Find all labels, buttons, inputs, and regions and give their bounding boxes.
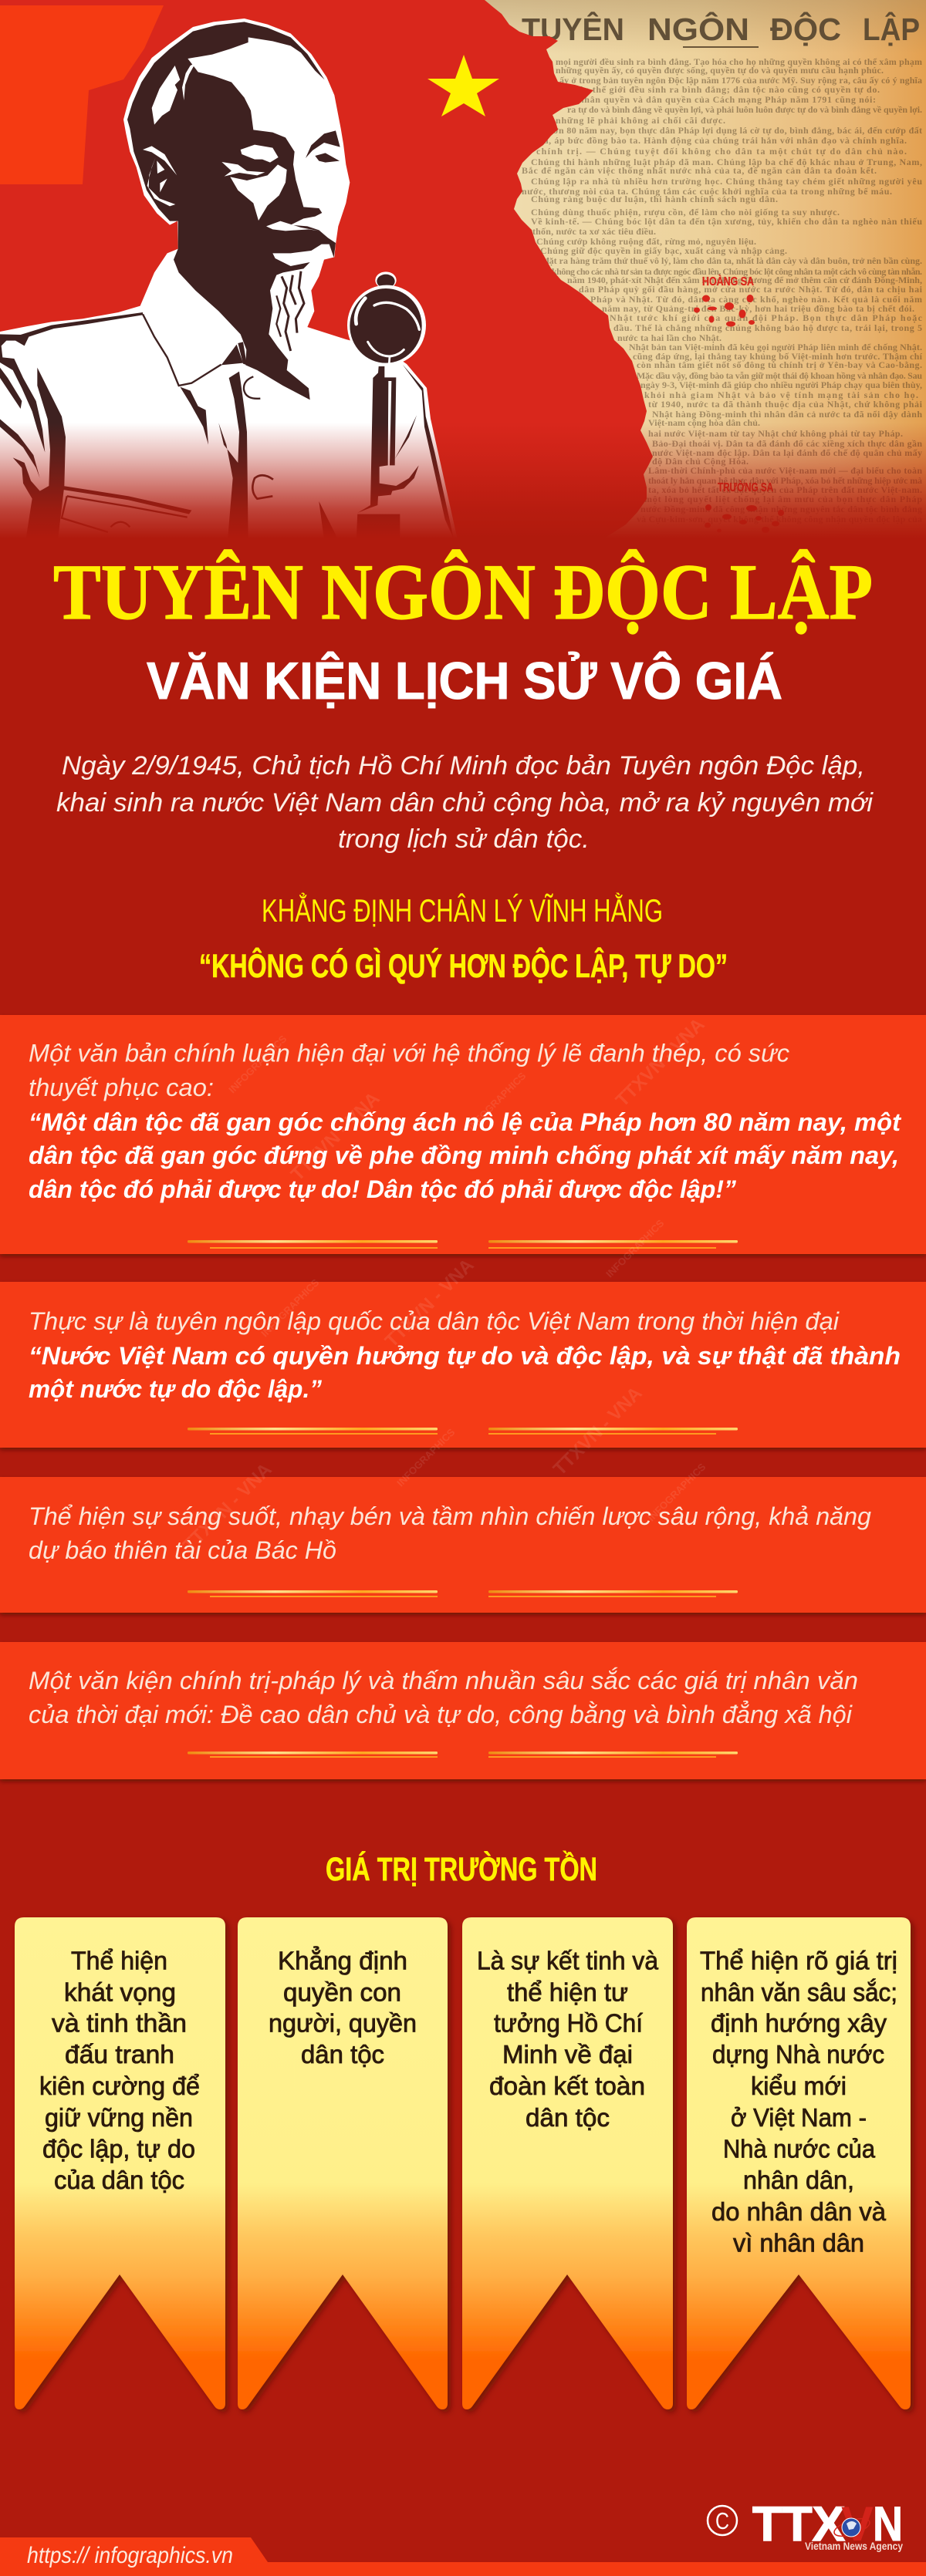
card: fourth value: kiểu mới <box>751 2072 847 2100</box>
bold quotation: “Một dân tộc đã gan góc chống ách nô lệ của Pháp hơn 80 năm nay, một <box>29 1108 901 1136</box>
card: second value: Khẳng định <box>278 1946 407 1974</box>
newspaper body text: ấy ở trong bản tuyên ngôn Độc lập năm 1776 của nước Mỹ. Suy rộng ra, câu ấy có ý nghĩa <box>559 75 922 86</box>
newspaper body text: Mặc dầu vậy, đồng bào ta vẫn giữ một thái độ khoan hồng và nhân đạo. Sau <box>637 370 922 381</box>
panel: fourth statement <box>0 1642 926 1779</box>
card: third value: Là sự kết tinh và <box>477 1946 659 1974</box>
logo: copyright and TTXVN: Vietnam News Agency <box>805 2541 903 2552</box>
card: first value: của dân tộc <box>54 2166 184 2194</box>
newspaper body text: thoát ly hẳn quan hệ thực dân với Pháp, xóa bỏ hết những hiệp ước mà <box>648 475 922 486</box>
newspaper body text: ta, xóa bỏ hết tất cả đặc quyền của Pháp trên đất nước Việt-nam. <box>648 484 922 495</box>
intro paragraph: trong lịch sử dân tộc. <box>338 824 590 854</box>
text: INFOGRAPHICS <box>259 1276 322 1339</box>
panel: third statement: Thể hiện sự sáng suốt, nhạy bén và tầm nhìn chiến lược sâu rộng, khả năng <box>29 1502 871 1530</box>
icon: copyright <box>708 2506 737 2535</box>
newspaper body text: đầu. Thế là chẳng những chúng không bảo hộ được ta, trái lại, trong 5 <box>613 322 922 333</box>
card: first value <box>15 1917 225 2409</box>
newspaper body text: Chúng dùng thuốc phiện, rượu cồn, để làm cho nòi giống ta suy nhược. <box>531 207 840 217</box>
newspaper body text: Bắc để ngăn cản việc thống nhất nước nhà của ta, để ngăn cản dân ta đoàn kết. <box>522 165 877 176</box>
card: second value: dân tộc <box>301 2040 384 2069</box>
panel: first statement: Một văn bản chính luận hiện đại với hệ thống lý lẽ đanh thép, có sức <box>29 1040 789 1067</box>
icon: yellow star <box>428 55 499 116</box>
panel: fourth statement: của thời đại mới: Đề cao dân chủ và tự do, công bằng và bình đẳng xã hội <box>29 1701 853 1728</box>
card: third value: đoàn kết toàn <box>489 2072 645 2100</box>
newspaper body text: Chúng thi hành những luật pháp dã man. Chúng lập ba chế độ khác nhau ở Trung, Nam, <box>531 157 922 167</box>
newspaper body text: khỏi nhà giam Nhật và bảo vệ tính mạng tài sản cho họ. <box>644 389 918 400</box>
card: first value: và tinh thần <box>52 2009 187 2038</box>
portrait hair, shadow and beard <box>127 22 336 400</box>
intro paragraph: khai sinh ra nước Việt Nam dân chủ cộng hòa, mở ra kỷ nguyên mới <box>56 788 874 818</box>
card: second value: người, quyền <box>269 2009 417 2038</box>
card: fourth value: Nhà nước của <box>723 2135 876 2163</box>
islands: Trường Sa <box>705 504 784 533</box>
newspaper body text: không cho các nhà tư sản ta được ngóc đầu lên. Chúng bóc lột công nhân ta một cách vô cùng tàn nhẫn. <box>552 266 922 277</box>
newspaper headline: LẬP <box>863 12 920 47</box>
panel: third statement: dự báo thiên tài của Bác Hồ <box>29 1536 336 1564</box>
panel: red flag map shape <box>0 0 653 540</box>
card: first value: khát vọng <box>64 1978 176 2006</box>
footer band with website: https:// infographics.vn <box>27 2543 233 2568</box>
newspaper body text: Lâm-thời Chính-phủ của nước Việt-nam mới — đại biểu cho toàn <box>648 465 922 476</box>
panel: first statement <box>0 1015 926 1254</box>
newspaper body text: Chúng giữ độc quyền in giấy bạc, xuất cảng và nhập cảng. <box>540 245 787 256</box>
logo: copyright and TTXVN: TTX <box>752 2497 845 2551</box>
text: INFOGRAPHICS <box>465 1070 529 1132</box>
newspaper headline: TUYÊN <box>522 12 624 47</box>
subtitle: VĂN KIỆN LỊCH SỬ VÔ GIÁ <box>147 651 782 710</box>
bold quotation: “Nước Việt Nam có quyền hưởng tự do và độc lập, và sự thật đã thành <box>29 1342 901 1370</box>
card: third value: Minh về đại <box>502 2040 633 2069</box>
card: first value: Thể hiện <box>71 1946 167 1974</box>
newspaper body text: ta, áp bức đồng bào ta. Hành động của chúng trái hẳn với nhân đạo và chính nghĩa. <box>540 135 907 146</box>
newspaper body text: những quyền ấy, có quyền được sống, quyền tự do và quyền mưu cầu hạnh phúc. <box>556 65 884 76</box>
portrait white highlights: hair, ear, eye, cheek, moustache <box>143 63 319 231</box>
bold quotation <box>29 1342 901 1403</box>
card: fourth value: vì nhân dân <box>733 2228 864 2257</box>
newspaper body text: ngày 9-3, Việt-minh đã giúp cho nhiều người Pháp chạy qua biên thùy, <box>640 379 922 390</box>
card: third value: dân tộc <box>526 2103 610 2132</box>
card: first value: giữ vững nền <box>45 2103 193 2132</box>
panel: second statement <box>0 1282 926 1448</box>
panel: fourth statement: Một văn kiện chính trị-pháp lý và thấm nhuần sâu sắc các giá trị nhân văn <box>29 1667 858 1694</box>
islands: Hoàng Sa <box>694 295 755 327</box>
card: fourth value: định hướng xây <box>711 2009 887 2038</box>
intro paragraph <box>56 751 874 854</box>
newspaper body text: dân Pháp quỳ gối đầu hàng, mở cửa nước ta rước Nhật. Từ đó, dân ta chịu hai <box>579 284 923 295</box>
newspaper body text: nhân quyền và dân quyền của Cách mạng Pháp năm 1791 cũng nói: <box>579 94 876 105</box>
newspaper headline: ĐỘC <box>770 12 841 47</box>
text: TTXVN - VNA <box>287 1088 384 1185</box>
card: fourth value: nhân văn sâu sắc; <box>701 1978 897 2006</box>
newspaper body text: nước Đồng-minh đã công nhận những nguyên tắc dân tộc bình đẳng <box>640 504 922 514</box>
bold quotation: dân tộc đã gan góc đứng về phe đồng minh chống phát xít mấy năm nay, <box>29 1141 899 1169</box>
newspaper body text: độ Dân chủ Cộng Hòa. <box>652 456 749 467</box>
newspaper body text: đặt ra hàng trăm thứ thuế vô lý, làm cho dân ta, nhất là dân cày và dân buôn, trở nên bần cùng. <box>544 255 922 266</box>
bold quotation <box>29 1108 901 1203</box>
portrait white silhouette <box>0 19 458 540</box>
newspaper body text: Nhật hàng Đồng-minh thì nhân dân cả nước ta đã nổi dậy dành <box>652 409 922 420</box>
newspaper headline: NGÔN <box>647 12 749 47</box>
newspaper body text: Nhật bản tan Việt-minh đã kêu gọi người Pháp liên minh để chống Nhật. <box>629 342 922 352</box>
card: second value: quyền con <box>283 1978 401 2006</box>
logo: copyright and TTXVN: N <box>873 2497 903 2551</box>
newspaper body text: Chúng ràng buộc dư luận, thi hành chính sách ngu dân. <box>531 194 778 204</box>
text: INFOGRAPHICS <box>645 1461 708 1523</box>
panel: orange corner block <box>0 5 164 184</box>
bold quotation: dân tộc đó phải được tự do! Dân tộc đó phải được độc lập!” <box>29 1175 736 1203</box>
text: INFOGRAPHICS <box>603 1217 667 1280</box>
label: Hoàng Sa: HOÀNG SA <box>702 274 754 288</box>
logo: copyright and TTXVN: V <box>841 2497 874 2551</box>
newspaper body text: từ 1940, nước ta đã thành thuộc địa của Nhật, chứ không phải <box>648 399 923 410</box>
newspaper body text: Chúng cướp không ruộng đất, rừng mỏ, nguyên liệu. <box>536 236 756 247</box>
newspaper body text: Về kinh-tế. — Chúng bóc lột dân ta đến tận xương, tủy, khiến cho dân ta nghèo nàn thiếu <box>531 216 922 227</box>
newspaper body text: mọi người đều sinh ra bình đẳng. Tạo hóa cho họ những quyền không ai có thể xâm phạm <box>556 56 922 67</box>
card: fourth value: do nhân dân và <box>711 2197 887 2226</box>
intro paragraph: Ngày 2/9/1945, Chủ tịch Hồ Chí Minh đọc bản Tuyên ngôn Độc lập, <box>62 751 865 781</box>
card: fourth value <box>687 1917 911 2409</box>
microphone <box>347 271 454 540</box>
newspaper body text: cũng đáp ứng, lại thẳng tay khủng bố Việt-minh hơn trước. Thậm chí <box>633 351 923 362</box>
newspaper body text: một lòng quyết liệt chống lại âm mưu của bọn thực dân Pháp <box>644 494 922 504</box>
card: first value: kiên cường để <box>39 2072 200 2100</box>
newspaper body text: trên thế giới đều sinh ra bình đẳng; dân tộc nào cũng có quyền tự do. <box>571 84 880 95</box>
coat folds, collar, pocket and buttons <box>0 312 338 540</box>
newspaper body text: nước ta hai lần cho Nhật. <box>617 332 722 343</box>
newspaper headline <box>522 12 920 47</box>
text: TTXVN - VNA <box>612 1014 709 1111</box>
header bottom fade <box>0 423 926 540</box>
card: fourth value: Thể hiện rõ giá trị <box>700 1946 897 1974</box>
newspaper body text: Pháp và Nhật. Từ đó, dân ta càng cực khổ, nghèo nàn. Kết quả là cuối năm <box>590 294 922 305</box>
panel: newspaper background <box>478 0 926 540</box>
newspaper body text: ra tự do và bình đẳng về quyền lợi, và phải luôn luôn được tự do và bình đẳng về quyền lợi. <box>567 104 922 115</box>
newspaper body text: Bảo-Đại thoái vị. Dân ta đã đánh đổ các xiềng xích thực dân gần <box>652 438 922 449</box>
newspaper body text: chính trị. — Chúng tuyệt đối không cho dân ta một chút tự do dân chủ nào. <box>536 146 907 157</box>
card: first value: đấu tranh <box>65 2040 174 2069</box>
portrait beard strands <box>276 271 304 351</box>
card: fourth value: dựng Nhà nước <box>712 2040 884 2069</box>
newspaper body text <box>522 56 923 524</box>
newspaper body text: nước, thương nòi của ta. Chúng tắm các cuộc khởi nghĩa của ta trong những bể máu. <box>522 186 892 197</box>
newspaper body text: những lẽ phải không ai chối cãi được. <box>556 115 725 126</box>
newspaper body text: năm 1940, phát-xít Nhật đến xâm lăng Đông Dương để mở thêm căn cứ đánh Đồng-Minh, <box>567 275 922 285</box>
footer band with website <box>0 2537 926 2576</box>
label: Trường Sa: TRƯỜNG SA <box>718 480 773 494</box>
card: fourth value: nhân dân, <box>743 2166 854 2194</box>
bold quotation: một nước tự do độc lập.” <box>29 1375 322 1403</box>
newspaper body text: Nhật tước khí giới của quân đội Pháp. Bọn thực dân Pháp hoặc <box>610 312 923 323</box>
text: INFOGRAPHICS <box>394 1426 458 1489</box>
icon: copyright: C <box>715 2507 729 2534</box>
newspaper body text: còn nhẫn tâm giết nốt số đông tù chính trị ở Yên-bay và Cao-bằng. <box>637 359 922 370</box>
newspaper body text: hơn 80 năm nay, bọn thực dân Pháp lợi dụng lá cờ tự do, bình đẳng, bác ái, đến cướp đất <box>548 125 922 136</box>
card: second value <box>238 1917 448 2409</box>
illustration: portrait of President Ho Chi Minh with microphone <box>0 19 458 540</box>
newspaper body text: năm nay, từ Quảng-trị đến Bắc-kỳ, hơn hai triệu đồng bào ta bị chết đói. <box>602 303 914 314</box>
card: third value: tưởng Hồ Chí <box>494 2009 643 2038</box>
text: TTXVN - VNA <box>381 1255 478 1352</box>
heading: quote: “KHÔNG CÓ GÌ QUÝ HƠN ĐỘC LẬP, TỰ DO” <box>199 947 728 985</box>
card: first value: độc lập, tự do <box>42 2135 195 2163</box>
newspaper body text: hai nước Việt-nam từ tay Nhật chứ không phải từ tay Pháp. <box>648 428 903 439</box>
newspaper body text: Việt-nam cộng hòa dân chủ. <box>648 417 760 428</box>
heading: Khẳng định chân lý vĩnh hằng: KHẲNG ĐỊNH CHÂN LÝ VĨNH HẰNG <box>262 892 663 929</box>
text: TTXVN - VNA <box>549 1383 647 1480</box>
newspaper body text: thốn, nước ta xơ xác tiêu điều. <box>532 226 656 237</box>
text: TTXVN - VNA <box>179 1459 276 1556</box>
newspaper body text: và Cựu-kim-sơn, quyết không thể không công nhận quyền độc lập của <box>637 514 922 524</box>
newspaper body text: nước Việt-nam độc lập. Dân ta lại đánh đổ chế độ quân chủ mấy <box>652 447 922 458</box>
panel: first statement: thuyết phục cao: <box>29 1074 214 1101</box>
newspaper body text: Chúng lập ra nhà tù nhiều hơn trường học. Chúng thẳng tay chém giết những người yêu <box>531 176 922 187</box>
card: fourth value: ở Việt Nam - <box>731 2103 867 2132</box>
card: third value: thể hiện tư <box>507 1978 628 2006</box>
heading: Giá trị trường tồn: GIÁ TRỊ TRƯỜNG TỒN <box>326 1850 597 1888</box>
panel: third statement <box>0 1477 926 1613</box>
panel: second statement: Thực sự là tuyên ngôn lập quốc của dân tộc Việt Nam trong thời hiện đại <box>29 1307 840 1335</box>
logo: copyright and TTXVN <box>708 2497 903 2552</box>
card: third value <box>462 1917 673 2409</box>
portrait right eye and eyebrow <box>306 130 340 163</box>
text: INFOGRAPHICS <box>226 1033 289 1095</box>
